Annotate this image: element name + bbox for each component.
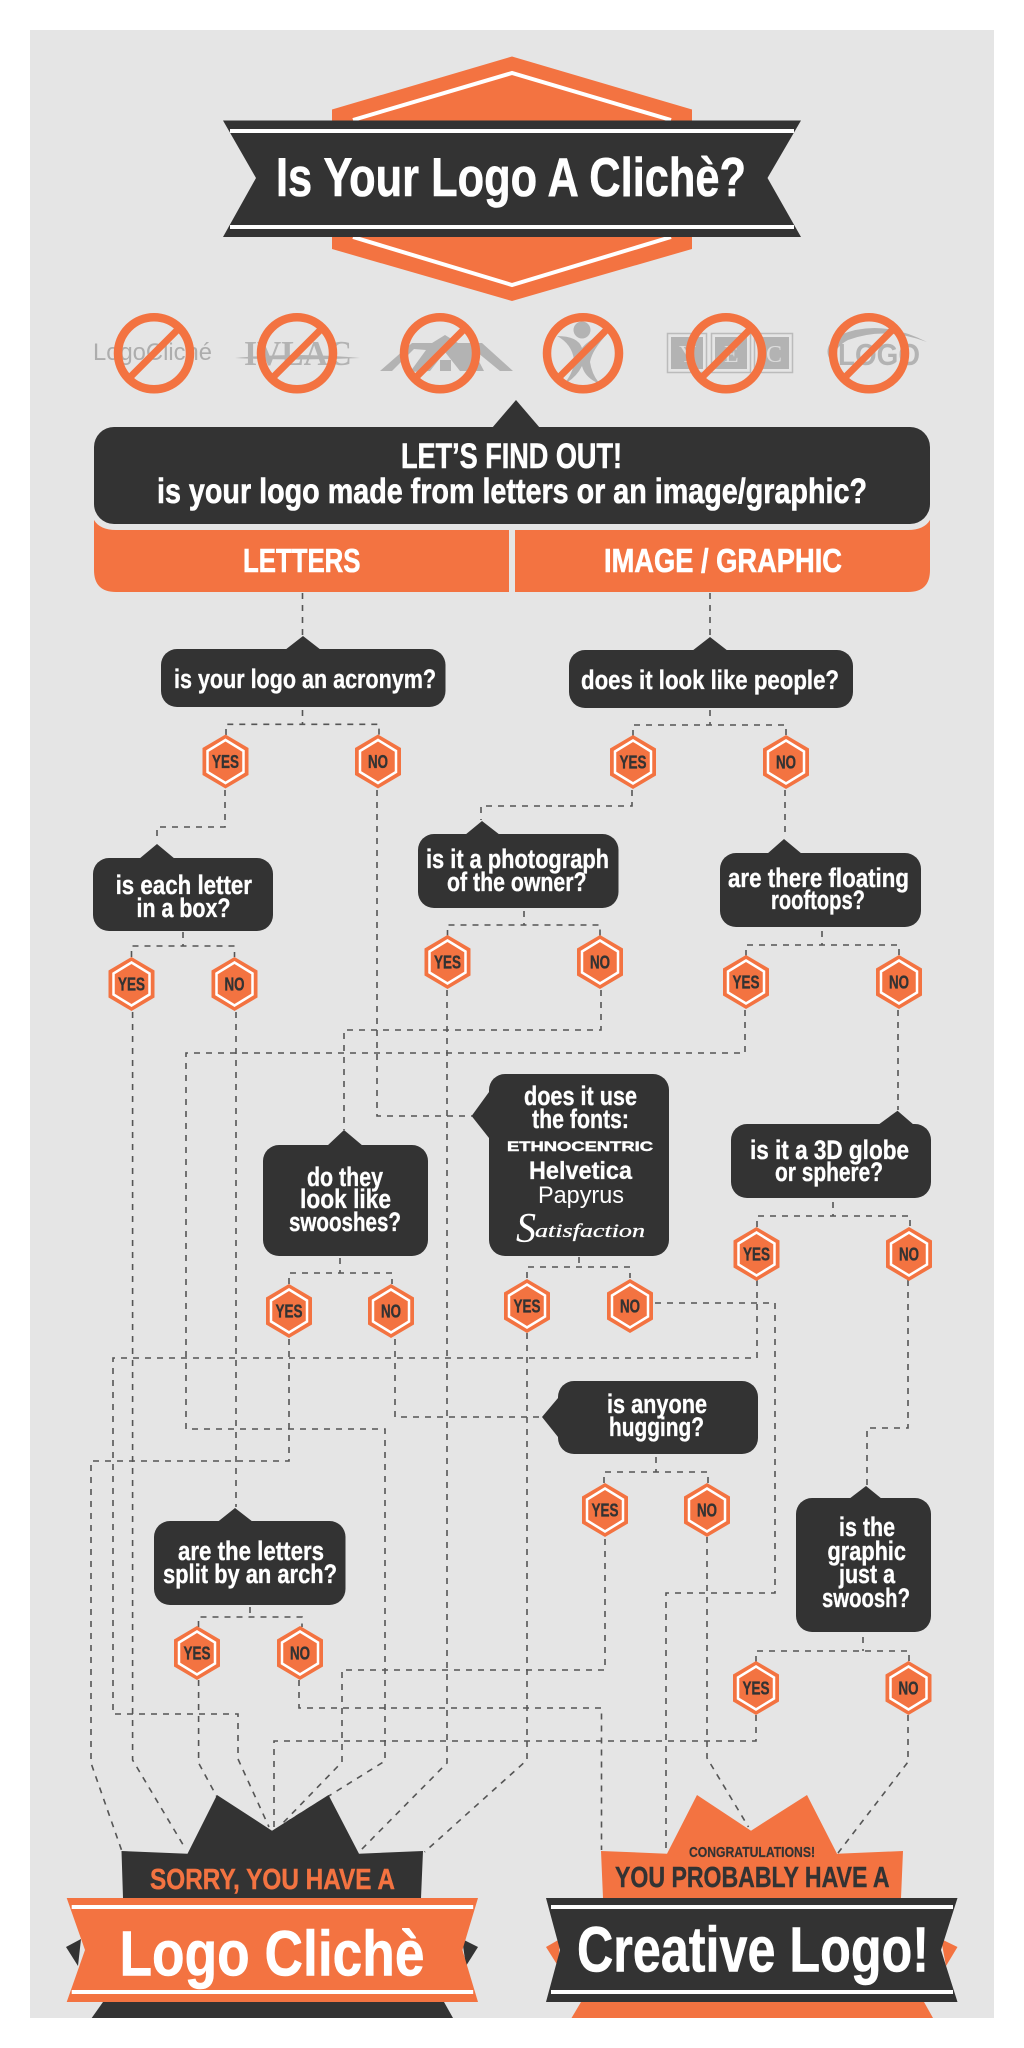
question: acronym: is your logo an acronym? <box>174 664 436 694</box>
badge: no (rooftops) <box>876 955 922 1009</box>
badge: no (arch) <box>277 1626 323 1680</box>
font sample: Satisfaction <box>516 1206 645 1252</box>
badge: yes (acronym) <box>202 734 248 788</box>
badge: no (box) <box>212 957 258 1011</box>
title ribbon <box>223 120 801 237</box>
option: letters: LETTERS <box>243 542 360 579</box>
question: photograph <box>418 821 618 908</box>
logo: letter boxes: Y <box>679 342 696 368</box>
question: hugging <box>542 1381 758 1454</box>
logo: rooftop <box>380 317 513 389</box>
badge: yes (people) <box>610 735 656 789</box>
question: rooftops: are there floating <box>728 863 909 893</box>
question: people: does it look like people? <box>581 665 839 695</box>
orange answer bar: left <box>94 520 509 592</box>
orange answer bar: right <box>515 520 930 592</box>
badge: yes (people): YES <box>620 752 646 772</box>
question: 3D globe: is it a 3D globe <box>750 1135 909 1165</box>
badge: no (people): NO <box>776 752 796 772</box>
question: letter in a box <box>93 844 273 931</box>
badge: no (people) <box>763 735 809 789</box>
badge: no (acronym): NO <box>368 752 388 772</box>
question: photograph: of the owner? <box>447 867 586 897</box>
question: people <box>569 637 853 708</box>
badge: no (graphic swoosh): NO <box>898 1678 918 1698</box>
question: graphic swoosh <box>796 1486 931 1632</box>
question: 3D globe: or sphere? <box>775 1157 883 1187</box>
badge: yes (graphic swoosh): YES <box>742 1678 770 1698</box>
question: swooshes: swooshes? <box>289 1207 401 1237</box>
badge: no (graphic swoosh) <box>886 1661 932 1715</box>
cliche logo row <box>93 317 927 389</box>
badge: yes (rooftops) <box>723 955 769 1009</box>
question: graphic swoosh: graphic <box>828 1536 906 1566</box>
font sample: Ethnocentric: ETHNOCENTRIC <box>507 1138 653 1154</box>
badge: yes (box) <box>108 957 154 1011</box>
question: swooshes: do they <box>307 1162 383 1192</box>
question: swooshes: look like <box>300 1184 391 1214</box>
logo: IVLAC <box>235 317 360 389</box>
badge: yes (hugging): YES <box>592 1500 618 1520</box>
badge: no (swooshes): NO <box>381 1302 401 1322</box>
question: fonts <box>472 1074 669 1256</box>
logo: letter boxes: E <box>724 342 739 368</box>
badge: no (photograph): NO <box>590 952 610 972</box>
result: logo cliché <box>66 1795 478 2018</box>
question: arch <box>154 1508 346 1605</box>
badge: yes (swooshes) <box>266 1284 312 1338</box>
badge: no (globe) <box>886 1227 932 1281</box>
badge: no (fonts): NO <box>620 1296 640 1316</box>
badge: no (hugging): NO <box>697 1500 717 1520</box>
question: 3D globe <box>731 1111 931 1198</box>
badge: no (rooftops): NO <box>889 972 909 992</box>
question: fonts: the fonts: <box>532 1104 629 1134</box>
font sample: Helvetica: Helvetica <box>529 1157 633 1185</box>
question: swooshes <box>263 1130 428 1256</box>
badge: yes (fonts) <box>504 1279 550 1333</box>
dark crown <box>122 1795 423 1898</box>
badge: yes (fonts): YES <box>514 1296 540 1316</box>
question: graphic swoosh: just a <box>838 1559 896 1589</box>
sorry text: SORRY, YOU HAVE A <box>150 1864 395 1896</box>
question: acronym <box>161 636 446 707</box>
badge: no (swooshes) <box>368 1284 414 1338</box>
logo: IVLAC: IVLAC <box>244 334 352 373</box>
result title: Creative Logo! <box>577 1914 929 1986</box>
badge: no (globe): NO <box>899 1244 919 1264</box>
option: image / graphic: IMAGE / GRAPHIC <box>604 542 842 579</box>
badge: yes (rooftops): YES <box>732 972 760 992</box>
badge: yes (swooshes): YES <box>276 1302 302 1322</box>
orange crown <box>601 1795 903 1898</box>
badge: yes (globe) <box>734 1227 780 1281</box>
badge: no (box): NO <box>224 974 244 994</box>
logo: LogoCliché: LogoCliché <box>93 339 212 366</box>
question: hugging: hugging? <box>609 1412 704 1442</box>
badge: yes (arch) <box>174 1626 220 1680</box>
badge: no (photograph) <box>577 935 623 989</box>
congratulations text: CONGRATULATIONS! <box>689 1844 815 1861</box>
orange ribbon <box>67 1898 478 2002</box>
hexagon behind title <box>332 56 692 301</box>
badge: yes (photograph): YES <box>434 952 461 972</box>
title badge <box>223 56 801 301</box>
question: rooftops: rooftops? <box>771 885 865 915</box>
question: graphic swoosh: is the <box>839 1512 895 1542</box>
badge: yes (hugging) <box>582 1483 628 1537</box>
question: letter in a box: in a box? <box>136 893 230 923</box>
result title: Logo Clichè <box>120 1918 424 1990</box>
font sample: Satisfaction: atisfaction <box>535 1221 645 1242</box>
font sample: Satisfaction: S <box>516 1206 536 1252</box>
question: arch: are the letters <box>178 1536 324 1566</box>
result: creative logo <box>546 1795 958 2018</box>
question: hugging: is anyone <box>607 1389 707 1419</box>
intro question box <box>94 400 930 592</box>
question: fonts: does it use <box>524 1081 637 1111</box>
dashed flow connectors <box>91 593 910 1853</box>
logo: swoosh LOGO: LOGO <box>838 337 920 372</box>
question: letter in a box: is each letter <box>116 870 252 900</box>
logo: swoosh LOGO <box>828 317 927 389</box>
badge: no (acronym) <box>355 734 401 788</box>
logo: person <box>547 317 619 389</box>
intro heading: LET’S FIND OUT! <box>401 437 622 476</box>
badge: no (arch): NO <box>290 1644 310 1664</box>
question: rooftops <box>720 839 921 927</box>
badge: no (hugging) <box>684 1483 730 1537</box>
intro question: is your logo made from letters or an image/graphic? <box>157 472 867 511</box>
logo: letter boxes <box>668 317 792 389</box>
logo: LogoCliché <box>93 317 212 389</box>
dark ribbon <box>546 1898 958 2002</box>
badge: yes (globe): YES <box>743 1244 770 1264</box>
badge: yes (acronym): YES <box>212 752 239 772</box>
badge: yes (graphic swoosh) <box>733 1661 779 1715</box>
badge: yes (box): YES <box>118 974 145 994</box>
logo: letter boxes: C <box>766 342 782 368</box>
question: arch: split by an arch? <box>163 1559 337 1589</box>
badge: yes (photograph) <box>424 935 470 989</box>
question: graphic swoosh: swoosh? <box>822 1583 910 1613</box>
title text: Is Your Logo A Clichè? <box>276 146 746 208</box>
font sample: Papyrus: Papyrus <box>538 1182 624 1209</box>
question: photograph: is it a photograph <box>426 844 609 874</box>
badge: no (fonts) <box>607 1279 653 1333</box>
you probably have text: YOU PROBABLY HAVE A <box>615 1862 890 1894</box>
badge: yes (arch): YES <box>184 1644 210 1664</box>
